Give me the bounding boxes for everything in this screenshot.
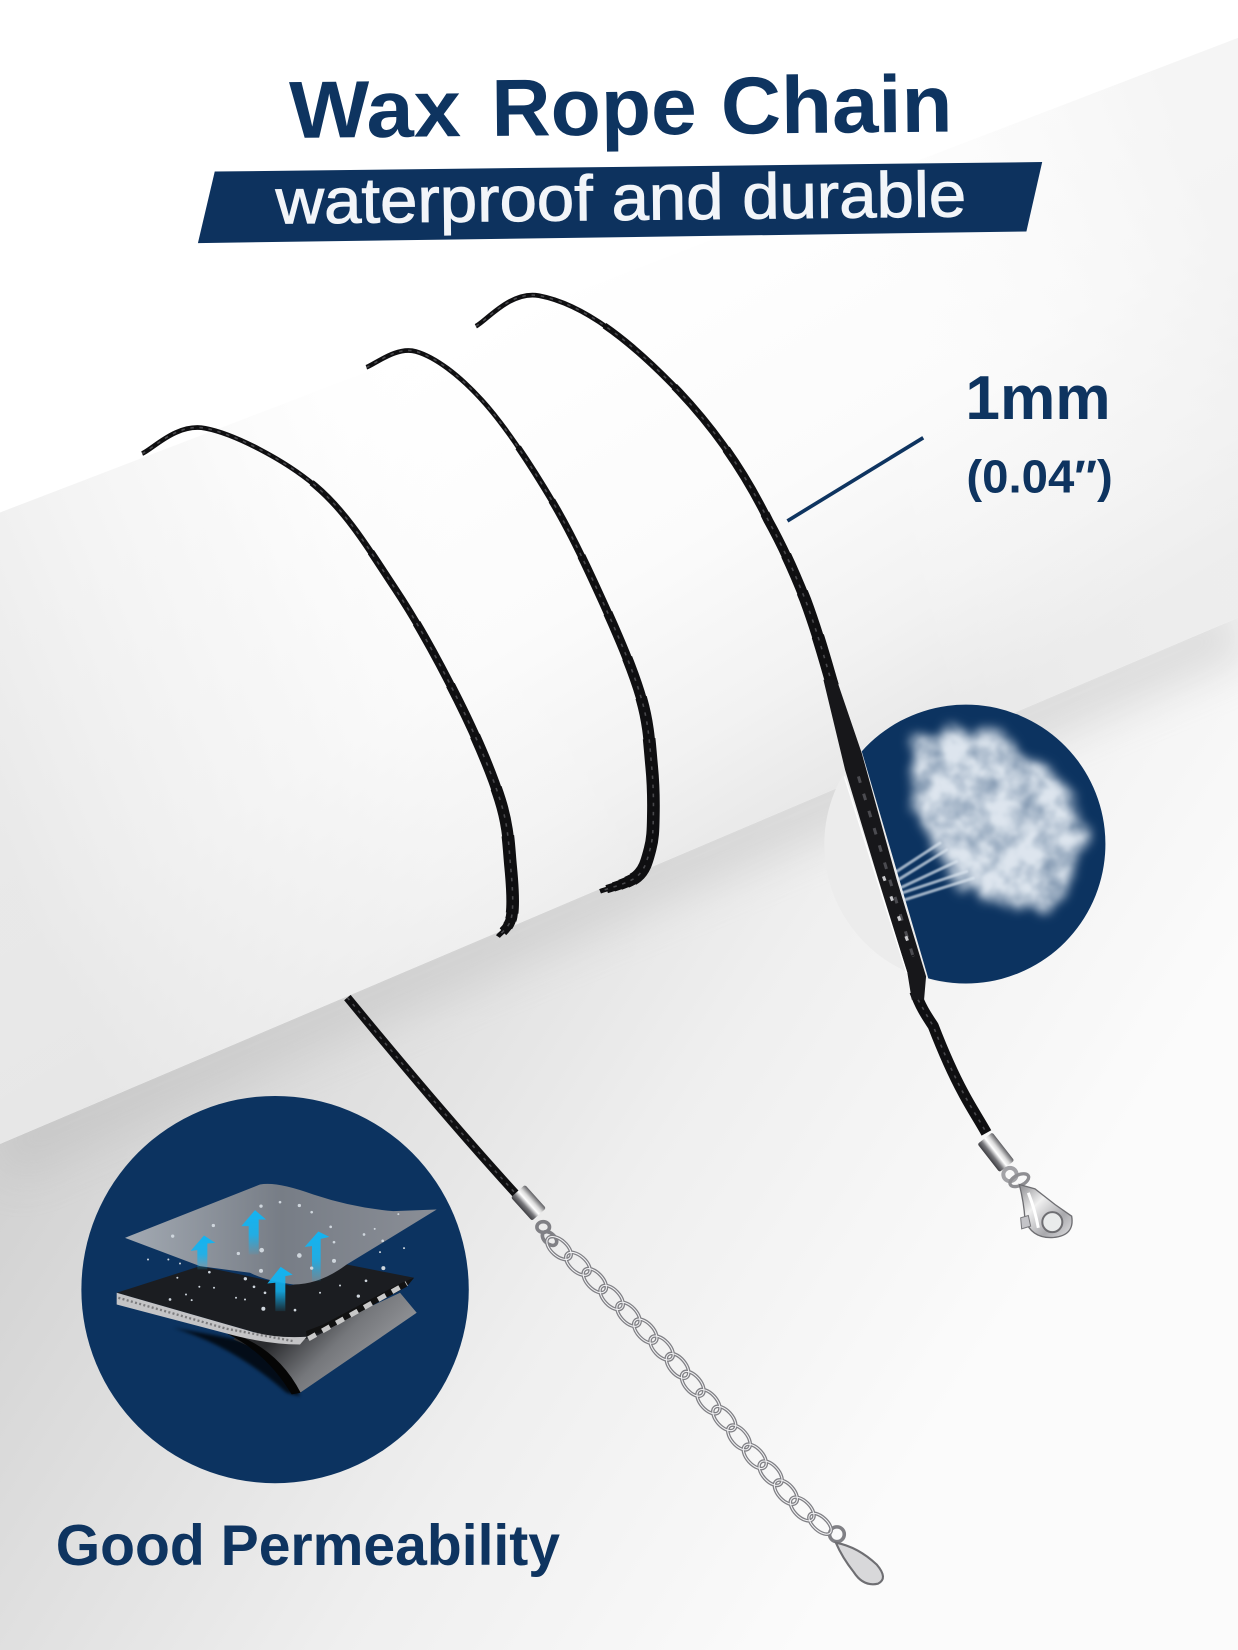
water droplets: [147, 1201, 405, 1311]
metal crimp end: extender side: [511, 1185, 546, 1221]
subtitle banner: [198, 158, 1042, 243]
fabric middle dark layer: [117, 1264, 414, 1344]
teardrop charm: [836, 1543, 883, 1584]
blue upward arrows: [191, 1210, 329, 1311]
title: Wax: [289, 64, 461, 156]
callout: permeability fabric circle: [81, 1096, 469, 1483]
cord loop 2: [366, 350, 653, 891]
fabric top membrane: [125, 1184, 437, 1284]
size label: inches: (0.04″): [966, 450, 1113, 502]
cord loop 1: [142, 428, 513, 937]
magnified cord: [823, 680, 926, 1000]
fabric bottom flap: [173, 1293, 417, 1396]
white cylinder tube: [0, 38, 1238, 1144]
callout: breathable steam circle: [823, 680, 1105, 1000]
subtitle text: waterproof and durable: [274, 158, 967, 238]
size label: 1mm: 1mm: [965, 364, 1111, 433]
cord lower end running to extender: [347, 998, 521, 1200]
extender chain: [537, 1222, 844, 1542]
diameter pointer line: [787, 438, 923, 521]
metal crimp end: clasp side: [977, 1132, 1014, 1172]
cord loop 3 running down to clasp: [476, 295, 986, 1133]
steam cloud and jets: [897, 728, 1084, 911]
title: Chain: [720, 60, 953, 152]
good permeability caption: Good Permeability: [56, 1514, 560, 1578]
title: [289, 60, 953, 156]
background: table surface: [0, 618, 1238, 1650]
title: Rope: [491, 62, 697, 154]
lobster clasp: [1003, 1168, 1072, 1238]
